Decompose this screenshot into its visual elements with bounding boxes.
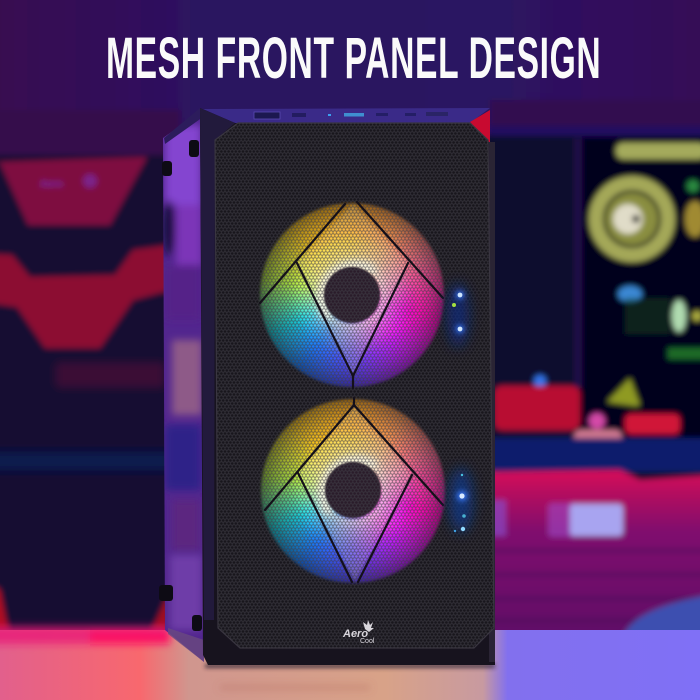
title: MESH FRONT PANEL DESIGN — [106, 27, 601, 91]
fan bottom RGB ring — [261, 399, 445, 583]
fan glow top — [297, 204, 408, 376]
fan top RGB ring — [260, 203, 444, 387]
mesh panel base — [215, 123, 494, 648]
case side panel — [159, 108, 204, 662]
blue status LEDs bottom — [449, 468, 473, 532]
background: right monitor — [490, 126, 700, 444]
fan frame lines bottom — [265, 398, 443, 582]
background: wooden table — [0, 626, 700, 700]
fan hub top — [324, 267, 380, 323]
table shadow under case — [205, 664, 495, 668]
background: left chair: Aero — [40, 179, 63, 190]
blue status LEDs top — [447, 283, 469, 347]
logo: AeroCool: Cool — [360, 638, 375, 645]
fan hub bottom — [325, 462, 381, 518]
case: PC tower body — [159, 108, 498, 672]
logo: AeroCool — [342, 620, 375, 645]
fan glow bottom — [298, 405, 412, 582]
case top with IO ports — [203, 108, 490, 144]
background: left chair — [0, 155, 170, 635]
logo: AeroCool: Aero — [342, 628, 368, 640]
background: desk edge — [490, 438, 700, 472]
fan frame lines top — [260, 202, 443, 388]
mesh texture — [215, 123, 494, 648]
background: red brick wall — [490, 470, 700, 640]
case front frame — [200, 108, 495, 665]
